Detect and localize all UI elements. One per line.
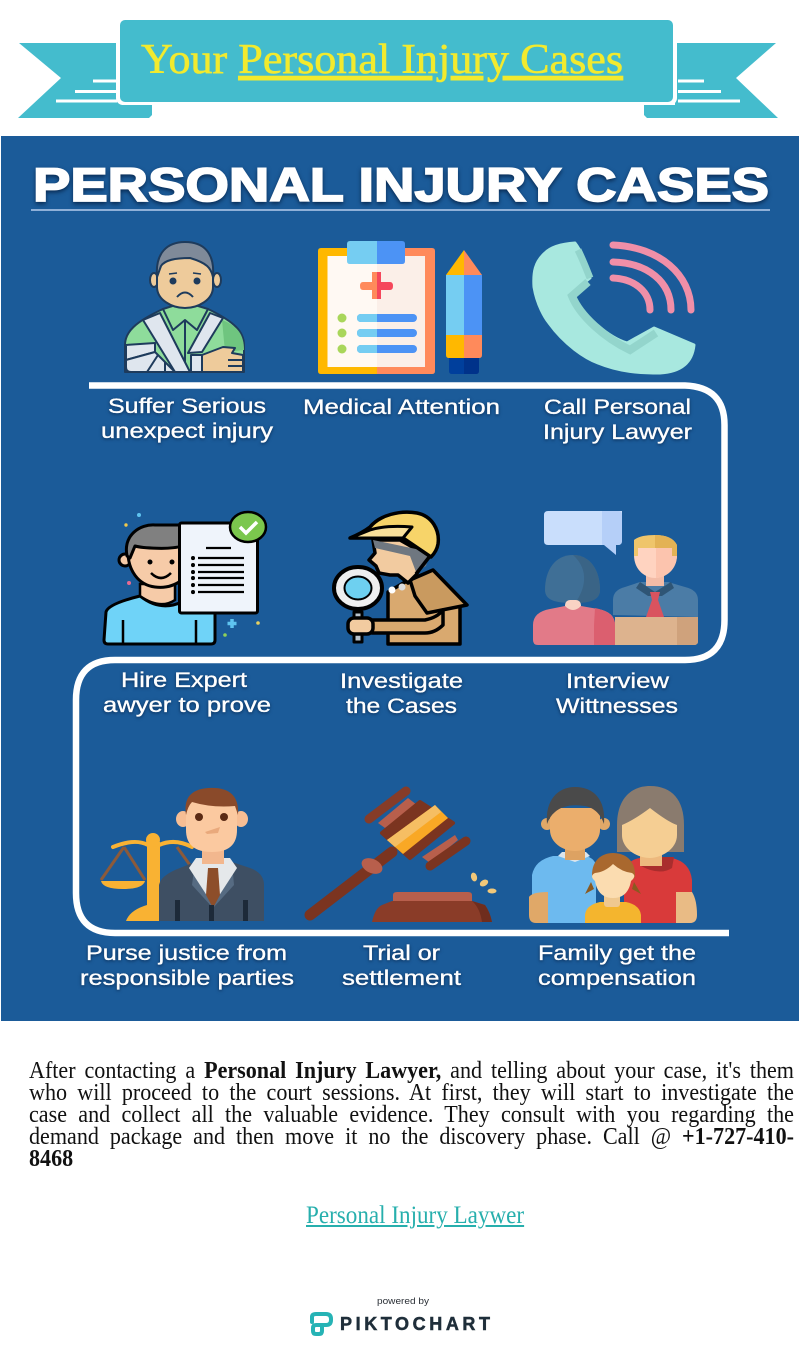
icon: interview scene (533, 511, 698, 645)
icon: investigator with magnifier (334, 512, 467, 644)
label: investigate (340, 670, 463, 718)
label: suffer injury (101, 395, 274, 443)
label: call lawyer: Call Personal (544, 396, 691, 419)
ribbon main plate (120, 20, 673, 102)
label: suffer injury: Suffer Serious (108, 395, 266, 418)
body paragraph: who will proceed to the court sessions. At first, they will start to investigate the (29, 1080, 794, 1106)
logo wordmark: PIKTOCHART (340, 1314, 490, 1334)
body paragraph: demand package and then move it no the discovery phase. Call @ +1-727-410- (29, 1124, 794, 1150)
label: pursue justice: responsible parties (80, 967, 294, 990)
ribbon banner (18, 17, 778, 118)
label: interview: Interview (566, 670, 670, 693)
label: pursue justice (80, 942, 294, 990)
banner title: Your Personal Injury Cases (141, 37, 623, 83)
icon: injured man (125, 242, 244, 372)
label: trial: Trial or (363, 942, 440, 965)
label: hire expert (103, 669, 271, 717)
icon: client with document (104, 512, 266, 644)
body paragraph (29, 1058, 794, 1172)
label: compensation: Family get the (538, 942, 696, 965)
connecting path (76, 386, 729, 933)
step labels (80, 395, 696, 990)
link: personal injury lawyer: Personal Injury Laywer (306, 1202, 524, 1229)
label: call lawyer: Injury Lawyer (543, 421, 692, 444)
label: compensation: compensation (538, 967, 696, 990)
label: suffer injury: unexpect injury (101, 420, 274, 443)
panel: personal injury process (1, 136, 799, 1021)
label: interview (556, 670, 678, 718)
label: trial (342, 942, 461, 990)
piktochart logo (312, 1314, 490, 1334)
ribbon right tail (644, 43, 778, 118)
label: investigate: the Cases (346, 695, 457, 718)
label: trial: settlement (342, 967, 461, 990)
label: hire expert: awyer to prove (103, 694, 271, 717)
label: medical attention: Medical Attention (303, 396, 500, 419)
label: call lawyer (543, 396, 692, 444)
icon: gavel (310, 791, 496, 922)
label: pursue justice: Purse justice from (86, 942, 287, 965)
icon: medical clipboard and pencil (318, 241, 482, 374)
ribbon left tail (18, 43, 152, 118)
icon: telephone (534, 243, 694, 373)
panel heading: PERSONAL INJURY CASES (33, 158, 769, 211)
label: investigate: Investigate (340, 670, 463, 693)
body paragraph: After contacting a Personal Injury Lawyer, and telling about your case, it's them (29, 1058, 794, 1084)
label: interview: Wittnesses (556, 695, 678, 718)
label: hire expert: Hire Expert (121, 669, 247, 692)
powered by credit: powered by (377, 1296, 429, 1307)
logo mark (312, 1314, 331, 1334)
icon: family (529, 786, 697, 923)
body paragraph: case and collect all the valuable evidence. They consult with you regarding the (29, 1102, 794, 1128)
body paragraph: 8468 (29, 1146, 73, 1172)
label: compensation (538, 942, 696, 990)
icon: lawyer with scales (101, 788, 264, 921)
